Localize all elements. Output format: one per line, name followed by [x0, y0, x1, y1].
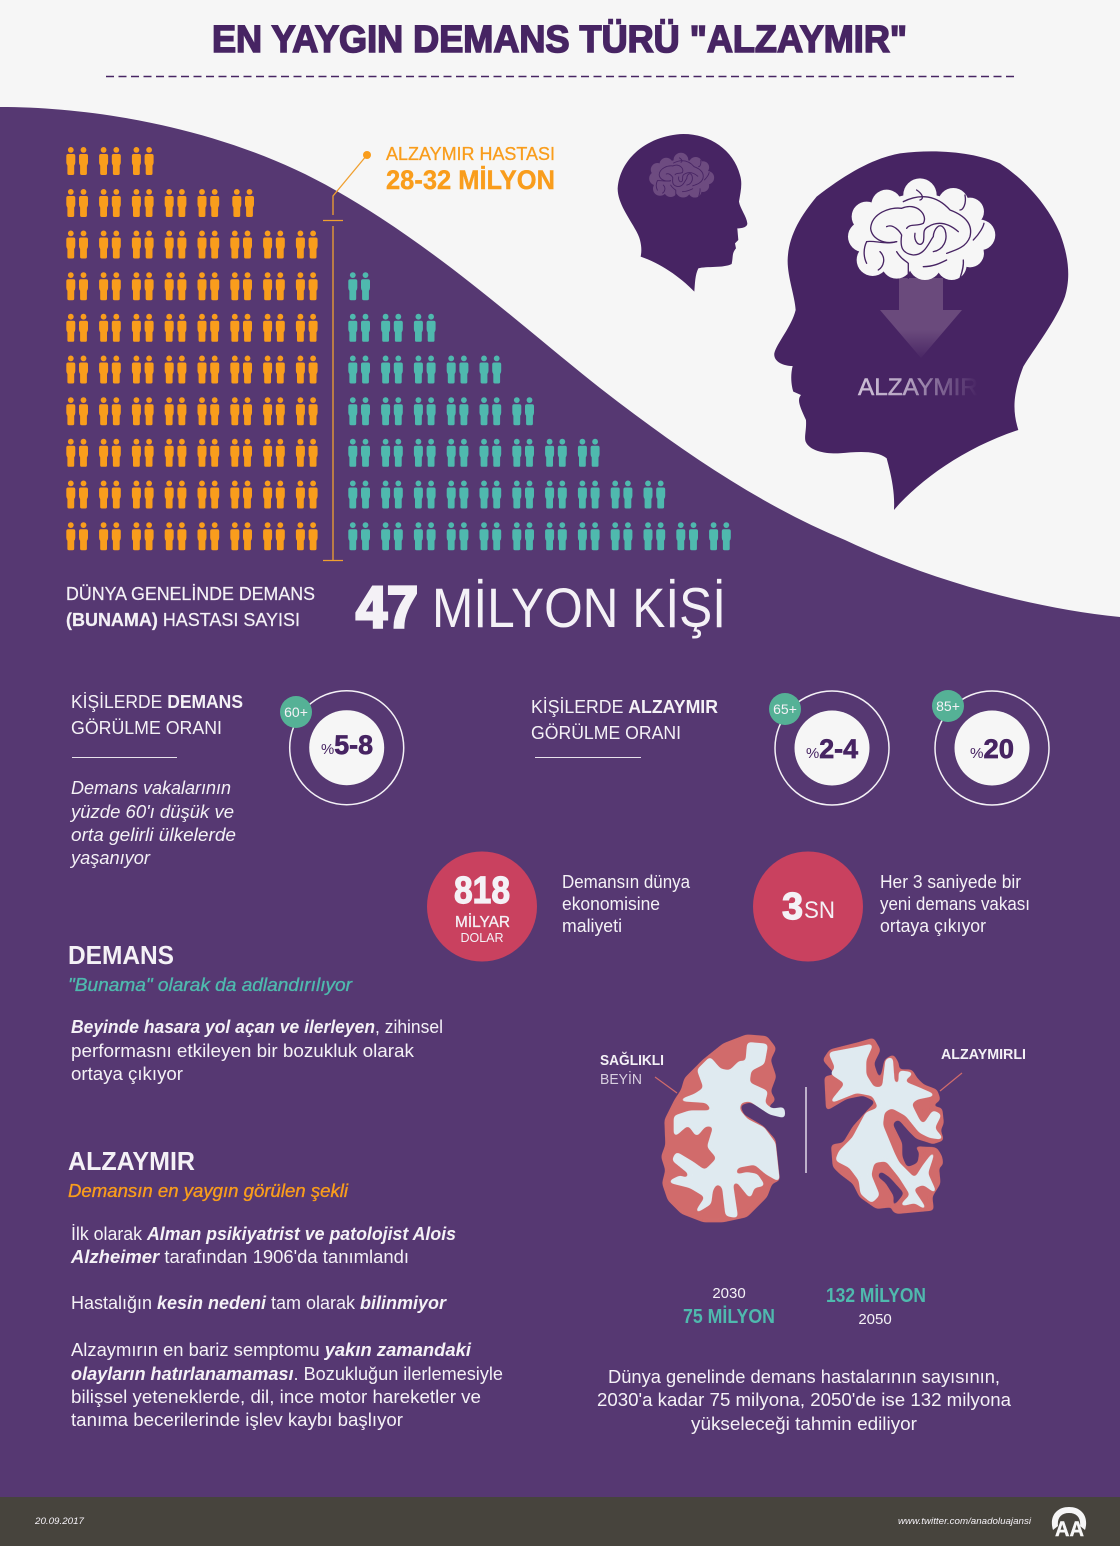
text block: new case frequency: yeni demans vakası — [880, 894, 1030, 914]
stat ring: age 60+ 5-8%: 60+ — [284, 704, 308, 720]
icon: Anadolu Agency logo: AA — [1055, 1518, 1084, 1541]
title: EN YAYGIN DEMANS TÜRÜ "ALZAYMIR" — [212, 18, 907, 61]
total dementia label: (BUNAMA) HASTASI SAYISI — [66, 610, 300, 630]
section: Alzheimer definition: Alzaymırın en bariz semptomu yakın zamandaki — [71, 1339, 472, 1360]
text block: new case frequency: ortaya çıkıyor — [880, 916, 986, 936]
text block: low income note: yüzde 60'ı düşük ve — [69, 802, 234, 822]
icon: Anadolu Agency logo — [1052, 1507, 1086, 1541]
footer bar: 20.09.2017 — [34, 1516, 85, 1527]
stat ring: age 85+ 20% — [932, 690, 1049, 805]
stat circle: 818 billion dollars — [427, 852, 537, 962]
big number: 47 million people: 47 — [356, 575, 418, 640]
projection: 2050: 2050 — [858, 1311, 892, 1328]
callout: Alzheimer patient count — [386, 144, 555, 195]
section: Alzheimer definition: Demansın en yaygın görülen şekli — [68, 1180, 349, 1201]
stat ring: age 85+ 20%: %20 — [970, 734, 1014, 764]
section: Alzheimer definition: İlk olarak Alman psikiyatrist ve patolojist Alois — [71, 1223, 456, 1244]
section: dementia definition — [68, 940, 443, 1084]
stat ring: age 65+ 2-4%: 65+ — [773, 701, 797, 717]
section: dementia definition: DEMANS — [68, 940, 174, 970]
stat ring: age 65+ 2-4% — [769, 691, 889, 805]
stat ring: age 60+ 5-8% — [280, 691, 404, 805]
projection: 2030: 2030 — [712, 1285, 746, 1302]
brain labels and leader lines: ALZAYMIRLI — [941, 1047, 1026, 1063]
stat circle: 818 billion dollars: MİLYAR — [455, 912, 510, 931]
stat ring: age 65+ 2-4%: %2-4 — [806, 734, 858, 764]
bracket and leader line — [323, 151, 371, 560]
section: Alzheimer definition: olayların hatırlanamaması. Bozukluğun ilerlemesiyle — [71, 1363, 503, 1384]
text block: low income note: yaşanıyor — [69, 848, 151, 868]
heading: dementia rate: KİŞİLERDE DEMANS — [71, 692, 243, 712]
projection: 2030 — [683, 1285, 775, 1328]
heading: dementia rate: GÖRÜLME ORANI — [71, 718, 222, 738]
orange pictogram: Alzheimer patients — [66, 147, 318, 550]
section: Alzheimer definition — [68, 1146, 503, 1430]
brain labels and leader lines — [600, 1047, 1026, 1173]
text block: economic cost: ekonomisine — [562, 894, 660, 914]
section: Alzheimer definition: tanıma becerilerinde işlev kaybı başlıyor — [71, 1409, 403, 1430]
text block: forecast: yükseleceği tahmin ediliyor — [691, 1413, 917, 1434]
text block: forecast: Dünya genelinde demans hastalarının sayısının, — [608, 1366, 1000, 1387]
section: dementia definition: Beyinde hasara yol açan ve ilerleyen, zihinsel — [71, 1016, 443, 1037]
projection: 2030: 75 MİLYON — [683, 1305, 775, 1328]
text block: economic cost: maliyeti — [562, 916, 622, 936]
big number: 47 million people: MİLYON KİŞİ — [432, 576, 726, 639]
footer bar — [0, 1497, 1120, 1546]
text block: economic cost — [562, 872, 691, 936]
section: Alzheimer definition: ALZAYMIR — [68, 1146, 195, 1176]
text block: low income note: orta gelirli ülkelerde — [71, 825, 236, 845]
stat circle: 3 seconds — [753, 852, 863, 962]
brain labels and leader lines: SAĞLIKLI — [600, 1051, 664, 1069]
text block: low income note — [69, 778, 236, 868]
projection: 2050: 132 MİLYON — [826, 1284, 926, 1307]
section: dementia definition: "Bunama" olarak da adlandırılıyor — [68, 974, 353, 995]
brain labels and leader lines: BEYİN — [600, 1070, 642, 1088]
stat circle: 818 billion dollars: 818 — [454, 870, 510, 912]
icon: large head with shrinking brain — [774, 151, 1068, 510]
projection: 2050 — [826, 1284, 926, 1328]
section: dementia definition: ortaya çıkıyor — [71, 1063, 183, 1084]
text block: economic cost: Demansın dünya — [562, 872, 691, 892]
teal pictogram: other dementia patients — [348, 272, 731, 550]
heading: Alzheimer rate: GÖRÜLME ORANI — [531, 723, 681, 743]
footer bar: www.twitter.com/anadoluajansi — [898, 1516, 1032, 1527]
callout: Alzheimer patient count: ALZAYMIR HASTASI — [386, 144, 555, 164]
icon: large head with shrinking brain: ALZAYMIR — [858, 374, 978, 401]
diagram: healthy brain cross-section — [662, 1035, 785, 1222]
stat ring: age 60+ 5-8%: %5-8 — [321, 730, 373, 760]
text block: low income note: Demans vakalarının — [71, 778, 231, 798]
section: dementia definition: performasnı etkileyen bir bozukluk olarak — [71, 1040, 415, 1061]
heading: Alzheimer rate — [531, 697, 718, 758]
text block: new case frequency — [880, 872, 1030, 936]
stat circle: 3 seconds: 3 — [782, 886, 803, 928]
total dementia label — [66, 584, 315, 630]
stat ring: age 85+ 20%: 85+ — [936, 698, 960, 714]
callout: Alzheimer patient count: 28-32 MİLYON — [386, 165, 555, 195]
stat circle: 3 seconds: SN — [804, 897, 835, 924]
text block: forecast — [597, 1366, 1012, 1434]
text block: forecast: 2030'a kadar 75 milyona, 2050'de ise 132 milyona — [597, 1389, 1012, 1410]
heading: dementia rate — [71, 692, 243, 758]
section: Alzheimer definition: Alzheimer tarafından 1906'da tanımlandı — [70, 1246, 409, 1267]
section: Alzheimer definition: Hastalığın kesin nedeni tam olarak bilinmiyor — [71, 1292, 448, 1313]
section: Alzheimer definition: bilişsel yeteneklerde, dil, ince motor hareketler ve — [71, 1386, 481, 1407]
total dementia label: DÜNYA GENELİNDE DEMANS — [66, 584, 315, 604]
diagram: Alzheimer brain cross-section — [823, 1038, 943, 1213]
heading: Alzheimer rate: KİŞİLERDE ALZAYMIR — [531, 697, 718, 717]
icon: small healthy head with brain — [618, 134, 747, 292]
text block: new case frequency: Her 3 saniyede bir — [880, 872, 1021, 892]
stat circle: 818 billion dollars: DOLAR — [460, 931, 504, 945]
